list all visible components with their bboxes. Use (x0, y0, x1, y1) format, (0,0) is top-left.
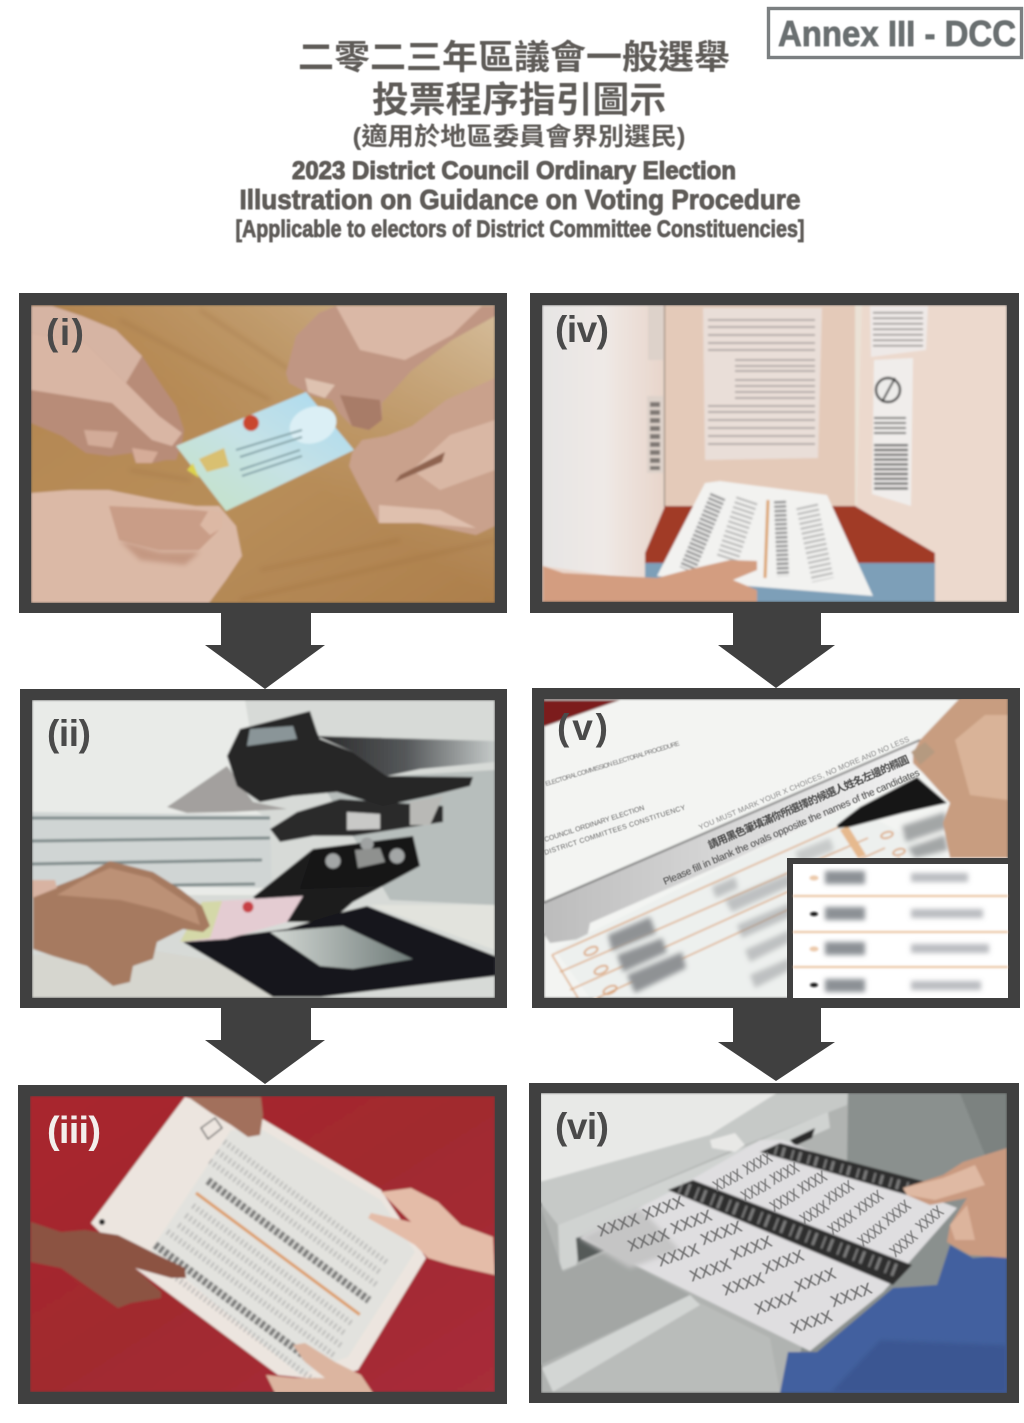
ballot XXXX marks: XXXX (741, 1149, 775, 1179)
ballot XXXX marks: XXXX (739, 1176, 773, 1206)
ballot printed text: 請用黑色筆填滿你所選擇的候選人姓名左邊的橢圓 (706, 753, 911, 852)
ballot XXXX marks: XXXX (596, 1211, 642, 1240)
step label iii: (iii) (47, 1110, 101, 1152)
title: English line 2: Illustration on Guidance on Voting Procedure (240, 184, 800, 215)
ballot XXXX marks: XXXX (887, 1228, 921, 1261)
step label ii: (ii) (47, 713, 91, 754)
title: Chinese line 2: 投票程序指引圖示 (372, 79, 666, 120)
title block (236, 39, 804, 243)
ballot printed text: Please fill in blank the ovals opposite the names of the candidates (662, 768, 922, 888)
inset: close-up of filled ovals (787, 858, 1008, 998)
ballot XXXX marks: XXXX (880, 1197, 914, 1229)
ballot printed text (543, 734, 922, 888)
ballot XXXX marks: XXXX (855, 1218, 889, 1250)
panel: step iii, ballot paper handed out (18, 1085, 507, 1404)
panel: step iv, marking booth (530, 293, 1019, 613)
ballot XXXX marks: XXXX (728, 1233, 775, 1264)
ballot XXXX marks: XXXX (768, 1186, 802, 1216)
ballot printed text: ELECTORAL COMMISSION ELECTORAL PROCEDURE (545, 740, 681, 788)
subtitle: English: [Applicable to electors of District Committee Constituencies] (236, 216, 804, 243)
arrow: i to ii (205, 613, 325, 689)
arrow: iv to v (718, 613, 835, 688)
title: Chinese line 1: 二零二三年區議會一般選舉 (298, 39, 730, 77)
ballot XXXX marks: XXXX (760, 1247, 807, 1278)
ballot XXXX marks: XXXX (640, 1193, 687, 1224)
arrow: v to vi (718, 1008, 835, 1081)
ballot XXXX marks: XXXX (768, 1159, 802, 1189)
ballot XXXX marks: XXXX (822, 1178, 857, 1208)
ballot XXXX marks: XXXX (796, 1168, 830, 1198)
ballot printed text: COUNCIL ORDINARY ELECTION (543, 805, 645, 844)
ballot XXXX marks: XXXX (711, 1166, 745, 1196)
panel: step ii, card scanned by reader (20, 689, 507, 1008)
ballot XXXX marks: XXXX (913, 1203, 947, 1236)
subtitle: Chinese: (適用於地區委員會界別選民) (352, 122, 686, 151)
ballot XXXX marks: XXXX (852, 1188, 887, 1219)
step label i: (i) (46, 312, 84, 353)
ballot XXXX marks: XXXX (753, 1289, 799, 1318)
ballot XXXX marks: XXXX (668, 1207, 715, 1238)
ballot XXXX marks: XXXX (656, 1241, 702, 1270)
panel: step v, filling the oval (532, 688, 1020, 1008)
ballot printed text: DISTRICT COMMITTEES CONSTITUENCY (543, 804, 687, 857)
ballot printed text: YOU MUST MARK YOUR X CHOICES, NO MORE AND NO LESS (697, 734, 911, 832)
arrow: ii to iii (205, 1008, 325, 1084)
ballot XXXX marks: XXXX (797, 1198, 832, 1228)
ballot XXXX marks: XXXX (688, 1256, 734, 1285)
step label v: (v) (557, 707, 608, 748)
step label iv: (iv) (555, 309, 609, 350)
ballot XXXX marks: XXXX (698, 1218, 745, 1249)
ballot XXXX marks: XXXX (789, 1308, 835, 1337)
title: English line 1: 2023 District Council Ordinary Election (292, 157, 736, 185)
ballot XXXX marks: XXXX (626, 1226, 672, 1255)
ballot XXXX marks: XXXX (721, 1270, 767, 1299)
ballot XXXX marks: XXXX (792, 1265, 839, 1296)
ballot XXXX marks: XXXX (825, 1208, 860, 1239)
ballot XXXX marks (596, 1149, 947, 1337)
ballot XXXX marks: XXXX (828, 1280, 875, 1311)
panel: step i, identity card handed over (19, 293, 507, 613)
step label vi: (vi) (555, 1106, 609, 1147)
panel: step vi, ballot into box (529, 1083, 1019, 1403)
